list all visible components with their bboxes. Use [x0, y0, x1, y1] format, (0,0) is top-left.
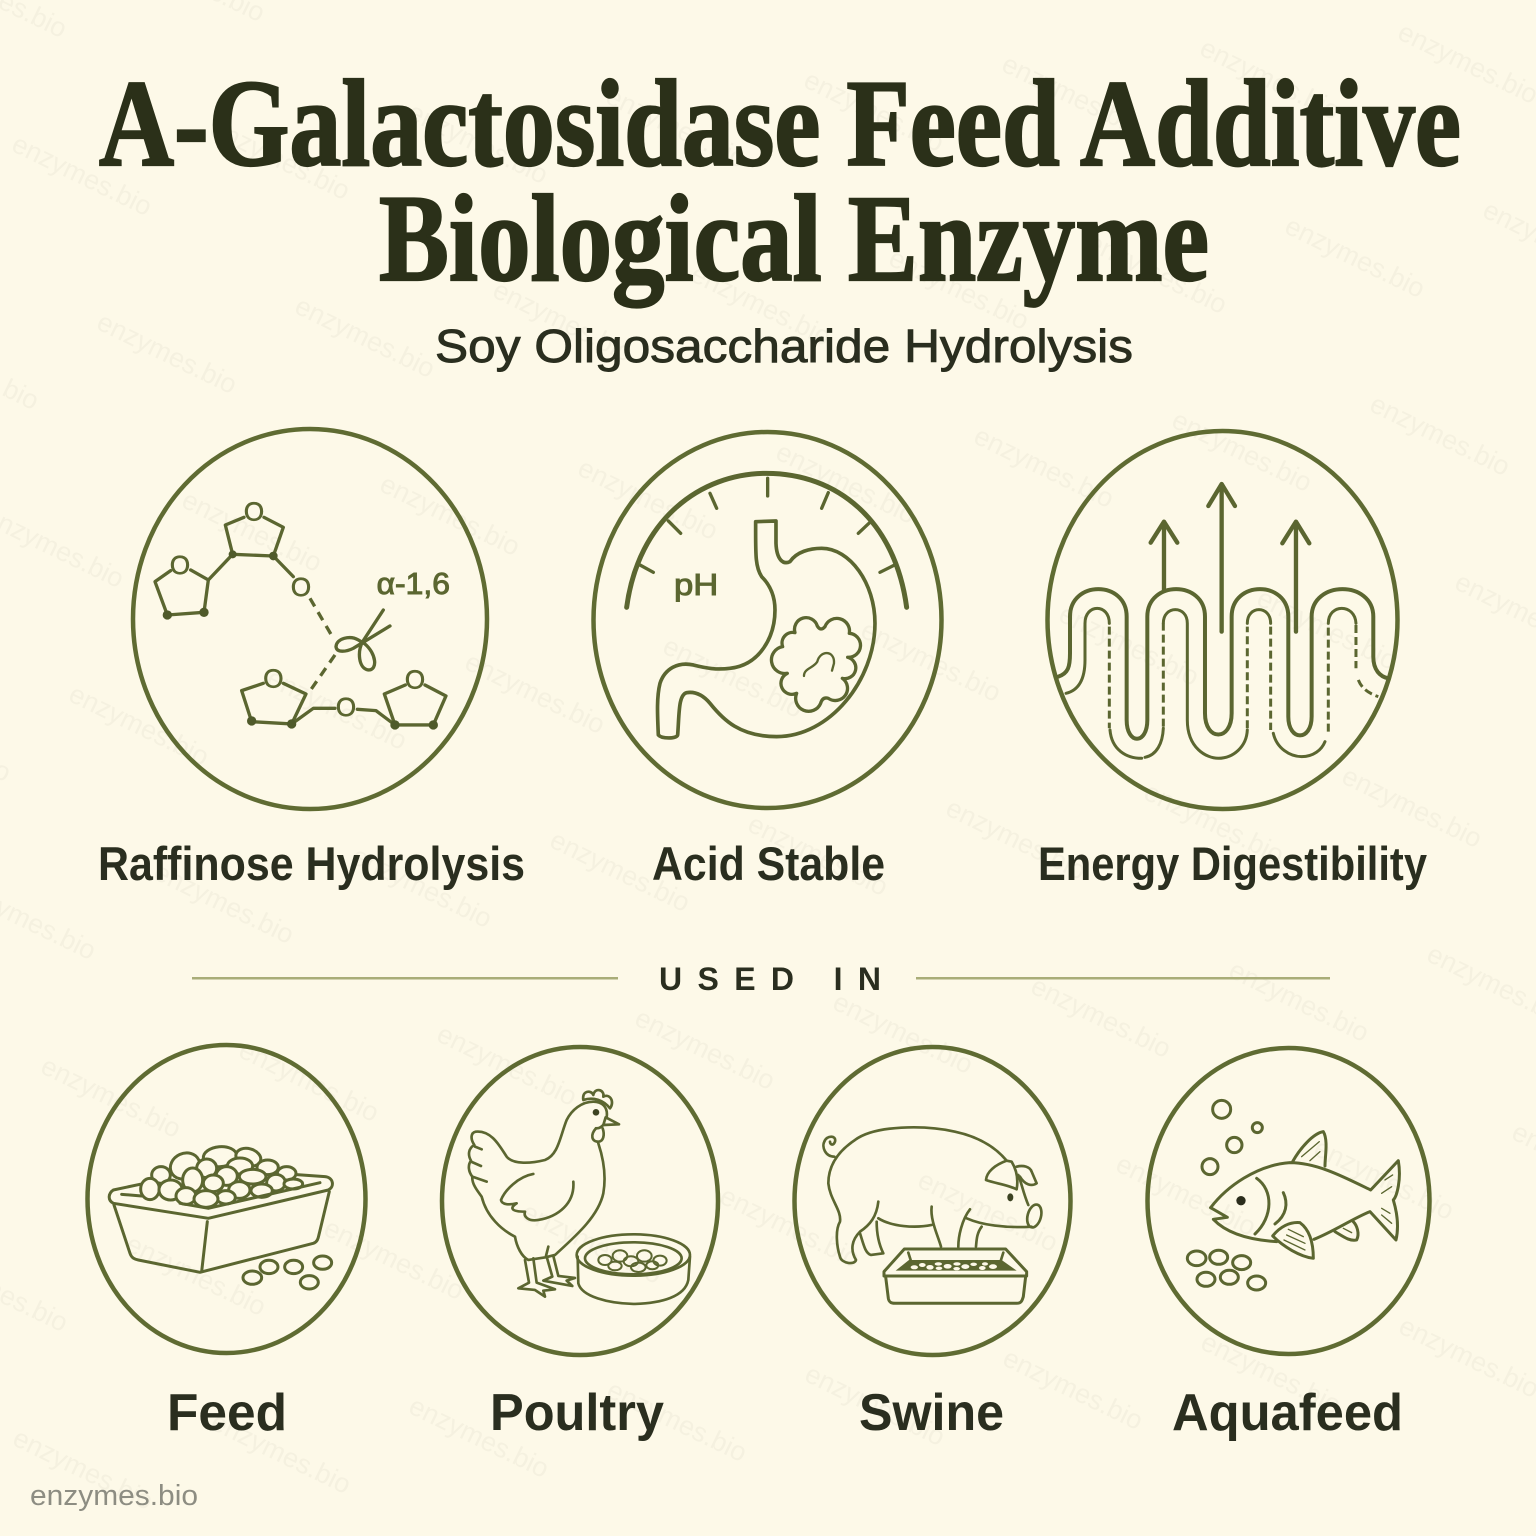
watermark pattern: enzymes.bio — [290, 290, 440, 384]
label: acid stable: Acid Stable — [652, 837, 885, 890]
watermark pattern: enzymes.bio — [1337, 760, 1487, 854]
watermark pattern: enzymes.bio — [64, 678, 214, 772]
icon: hen and feed bowl — [469, 1090, 690, 1304]
watermark pattern: enzymes.bio — [121, 1228, 271, 1322]
watermark pattern: enzymes.bio — [1139, 776, 1289, 870]
label: energy digestibility: Energy Digestibility — [1038, 837, 1427, 890]
icon: stomach with pH gauge — [627, 473, 907, 738]
watermark pattern: enzymes.bio — [1026, 970, 1176, 1064]
panel: poultry — [442, 1047, 718, 1355]
icon: raffinose molecule with scissors — [155, 497, 450, 730]
watermark pattern: enzymes.bio — [630, 1002, 780, 1096]
watermark pattern: enzymes.bio — [998, 1342, 1148, 1436]
ring — [88, 1045, 366, 1353]
icon: stomach with pH gauge: pH — [674, 568, 718, 602]
watermark pattern: enzymes.bio — [8, 1422, 158, 1516]
watermark pattern: enzymes.bio — [856, 614, 1006, 708]
icon: raffinose molecule with scissors: O — [291, 572, 311, 602]
ring — [1048, 431, 1398, 809]
watermark pattern: enzymes.bio — [205, 112, 355, 206]
watermark pattern: enzymes.bio — [800, 1358, 950, 1452]
icon: pig at trough — [823, 1127, 1044, 1303]
watermark pattern: enzymes.bio — [715, 1180, 865, 1274]
watermark pattern: enzymes.bio — [1196, 1326, 1346, 1420]
watermark pattern: enzymes.bio — [799, 64, 949, 158]
label: feed: Feed — [167, 1384, 287, 1442]
watermark pattern: enzymes.bio — [941, 792, 1091, 886]
watermark pattern: enzymes.bio — [1054, 598, 1204, 692]
panel: energy digestibility — [1048, 431, 1398, 809]
watermark pattern: enzymes.bio — [1111, 1148, 1261, 1242]
watermark pattern: enzymes.bio — [262, 662, 412, 756]
subtitle: Soy Oligosaccharide Hydrolysis — [435, 320, 1133, 372]
watermark pattern: enzymes.bio — [545, 824, 695, 918]
ring — [1148, 1048, 1430, 1354]
icon: raffinose molecule with scissors: O — [263, 663, 283, 693]
watermark pattern: enzymes.bio — [460, 646, 610, 740]
watermark pattern: enzymes.bio — [1224, 954, 1374, 1048]
label: swine: Swine — [859, 1384, 1004, 1442]
watermark pattern: enzymes.bio — [884, 242, 1034, 336]
watermark pattern: enzymes.bio — [913, 1164, 1063, 1258]
watermark pattern: enzymes.bio — [601, 80, 751, 174]
icon: raffinose molecule with scissors: O — [336, 692, 356, 722]
watermark pattern: enzymes.bio — [36, 1050, 186, 1144]
footer brand: enzymes.bio — [30, 1480, 198, 1512]
panel: acid stable — [594, 432, 942, 808]
icon: raffinose molecule with scissors: O — [244, 497, 264, 527]
watermark pattern: enzymes.bio — [404, 1390, 554, 1484]
label: raffinose hydrolysis: Raffinose Hydrolysis — [98, 837, 525, 890]
watermark pattern: enzymes.bio — [149, 856, 299, 950]
watermark pattern: enzymes.bio — [319, 1212, 469, 1306]
label: poultry: Poultry — [490, 1384, 664, 1442]
watermark pattern: enzymes.bio — [92, 306, 242, 400]
watermark pattern: enzymes.bio — [686, 258, 836, 352]
ring — [133, 429, 487, 809]
watermark pattern: enzymes.bio — [602, 1374, 752, 1468]
watermark pattern: enzymes.bio — [1252, 582, 1402, 676]
watermark pattern: enzymes.bio — [177, 484, 327, 578]
watermark pattern: enzymes.bio — [7, 128, 157, 222]
watermark pattern: enzymes.bio — [1195, 32, 1345, 126]
title: Biological Enzyme — [379, 170, 1209, 308]
watermark pattern: enzymes.bio — [828, 986, 978, 1080]
icon: intestinal villi with arrows — [1058, 484, 1388, 758]
watermark pattern: enzymes.bio — [432, 1018, 582, 1112]
watermark pattern: enzymes.bio — [969, 420, 1119, 514]
panel: aquafeed — [1148, 1048, 1430, 1354]
icon: feed trough — [109, 1145, 332, 1289]
icon: fish with bubbles and pellets — [1187, 1100, 1399, 1290]
watermark pattern: enzymes.bio — [206, 1406, 356, 1500]
label: aquafeed: Aquafeed — [1172, 1384, 1403, 1442]
title — [99, 55, 1461, 308]
ring — [594, 432, 942, 808]
watermark pattern: enzymes.bio — [743, 808, 893, 902]
watermark pattern: enzymes.bio — [658, 630, 808, 724]
ring — [442, 1047, 718, 1355]
watermark pattern: enzymes.bio — [1082, 226, 1232, 320]
watermark pattern: enzymes.bio — [234, 1034, 384, 1128]
watermark pattern: enzymes.bio — [997, 48, 1147, 142]
watermark pattern: enzymes.bio — [1167, 404, 1317, 498]
watermark pattern: enzymes.bio — [403, 96, 553, 190]
panel: swine — [794, 1047, 1070, 1355]
ring — [794, 1047, 1070, 1355]
watermark pattern: enzymes.bio — [517, 1196, 667, 1290]
icon: raffinose molecule with scissors: O — [405, 665, 425, 695]
watermark pattern: enzymes.bio — [771, 436, 921, 530]
watermark pattern: enzymes.bio — [347, 840, 497, 934]
watermark pattern: enzymes.bio — [488, 274, 638, 368]
watermark pattern: enzymes.bio — [573, 452, 723, 546]
icon: raffinose molecule with scissors: O — [170, 550, 190, 580]
watermark pattern: enzymes.bio — [1365, 388, 1515, 482]
section divider: used in: USED IN — [659, 961, 881, 997]
watermark pattern: enzymes.bio — [375, 468, 525, 562]
watermark pattern: enzymes.bio — [1280, 210, 1430, 304]
panel: feed — [88, 1045, 366, 1353]
watermark pattern: enzymes.bio — [1309, 1132, 1459, 1226]
icon: raffinose molecule with scissors: α-1,6 — [377, 567, 450, 601]
panel: raffinose hydrolysis — [133, 429, 487, 809]
